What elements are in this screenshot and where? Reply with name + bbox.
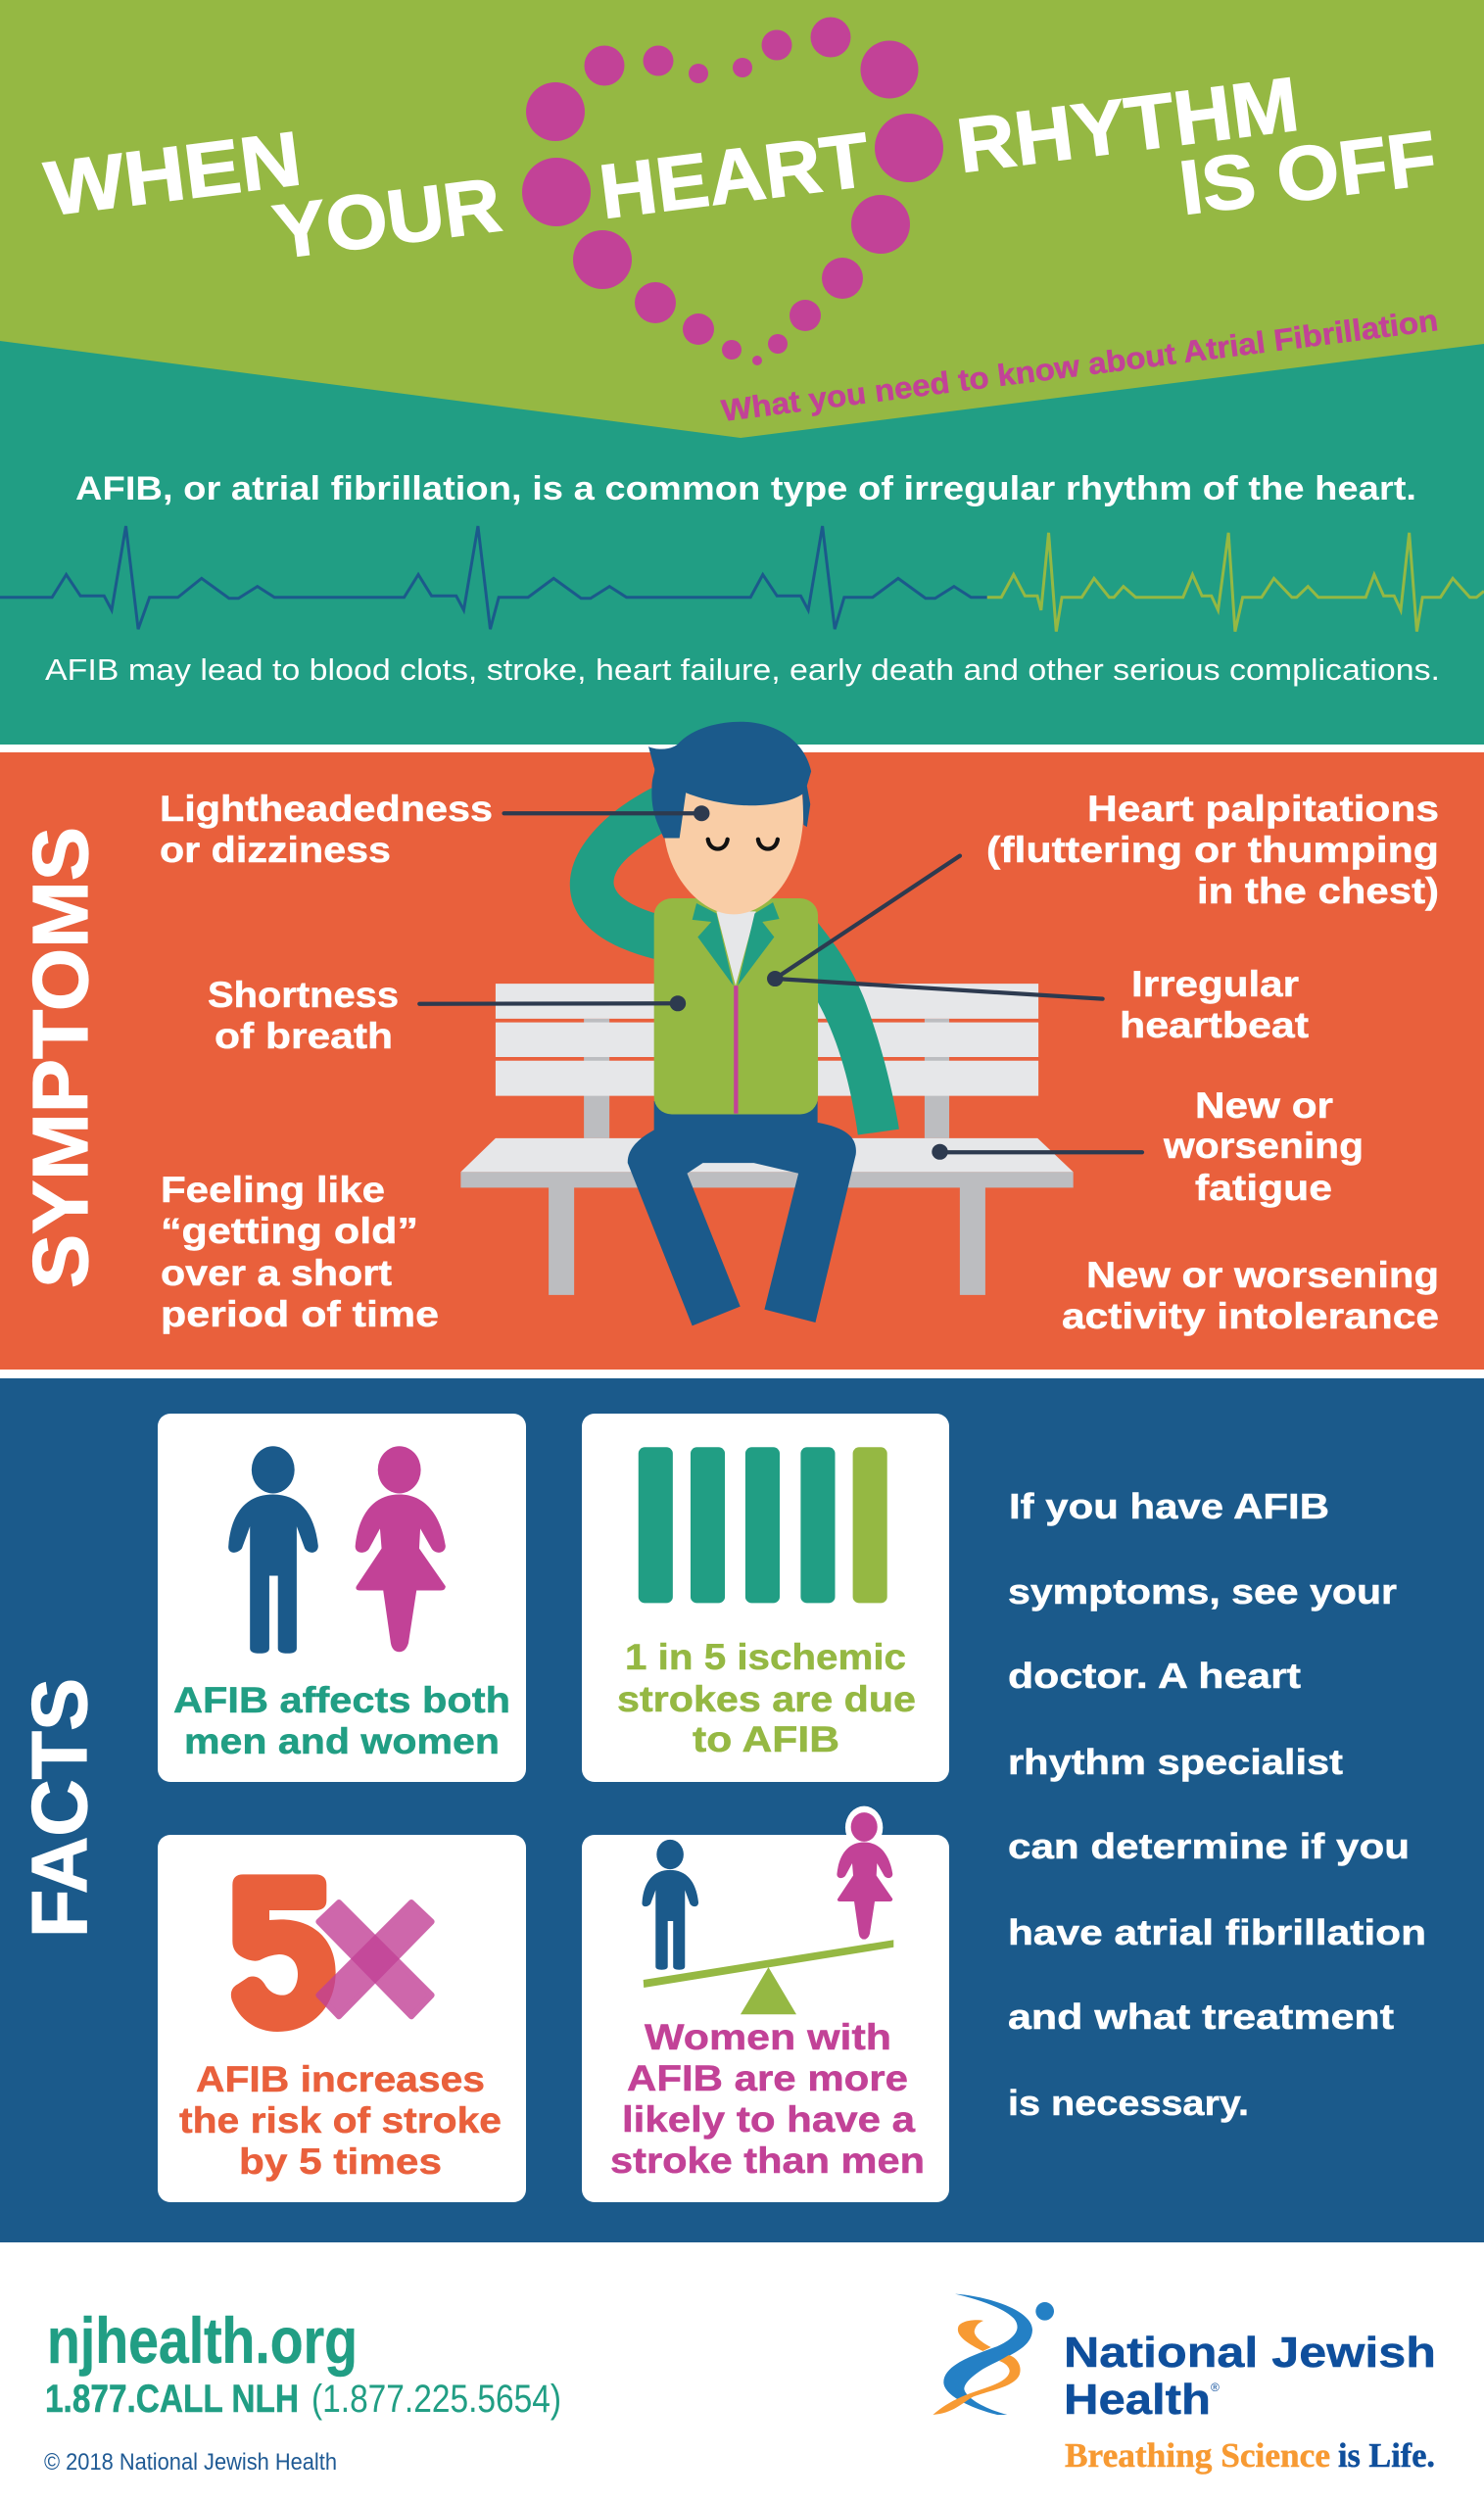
panel: footer [44,2294,1436,2476]
symptom: irregular heartbeat: heartbeat [1120,1005,1309,1045]
phone number [45,2378,561,2421]
advice text: is necessary. [1008,2083,1249,2123]
panel: facts [0,1378,1484,2242]
icon: man and woman [228,1446,446,1654]
symptom: activity intolerance: New or worsening [1086,1255,1439,1295]
callout lines [419,805,1142,1160]
advice text: doctor. A heart [1008,1656,1301,1696]
icon: 5x [231,1874,432,2032]
advice text: rhythm specialist [1008,1742,1343,1782]
definition complications text: AFIB may lead to blood clots, stroke, heart failure, early death and other serious complications. [45,652,1440,687]
icon: logo mark [933,2294,1054,2415]
symptom: palpitations [986,789,1439,911]
symptom: feeling old: “getting old” [161,1211,418,1251]
card text: likely to have a [622,2099,915,2140]
panel: header [0,0,1484,438]
symptom: shortness of breath: of breath [215,1016,393,1056]
card text: men and women [184,1721,500,1761]
symptom: feeling old: Feeling like [161,1170,385,1210]
symptom: palpitations: in the chest) [1197,871,1439,911]
symptom: lightheadedness: or dizziness [160,830,391,870]
card: 1 in 5 strokes [582,1414,949,1782]
panel: definition [0,333,1484,745]
card text: AFIB affects both [173,1680,510,1720]
card text: the risk of stroke [179,2100,502,2140]
card: five times risk [158,1835,526,2202]
title: IS OFF: IS OFF [1174,114,1441,231]
facts section label: FACTS [16,1678,103,1938]
card text [179,2059,502,2182]
tagline: Breathing Science [1065,2436,1330,2475]
icon: five bars [639,1447,887,1603]
card text [617,1637,916,1759]
heart of dots [522,18,943,365]
symptom: activity intolerance [1062,1255,1439,1336]
ECG line: irregular rhythm [987,533,1484,632]
logo wordmark: ® [1211,2381,1220,2394]
symptom: shortness of breath [208,975,399,1056]
symptom: fatigue: fatigue [1195,1168,1332,1208]
card text: 1 in 5 ischemic [625,1637,906,1677]
card text [173,1680,510,1761]
ECG line: normal rhythm [0,526,987,629]
advice text: If you have AFIB [1009,1486,1329,1526]
bench [460,984,1074,1295]
advice text: have atrial fibrillation [1008,1912,1426,1952]
copyright: © 2018 National Jewish Health [44,2449,337,2476]
logo wordmark: National Jewish [1064,2329,1436,2377]
symptom: lightheadedness [160,789,493,870]
website: njhealth.org [47,2304,358,2377]
symptom: irregular heartbeat: Irregular [1131,964,1299,1004]
card text: stroke than men [610,2140,925,2181]
symptom: shortness of breath: Shortness [208,975,399,1015]
card: women at higher risk [582,1806,949,2202]
logo wordmark [1064,2329,1436,2424]
title: HEART: HEART [595,116,874,235]
title: WHEN: WHEN [40,115,306,232]
symptom: palpitations: (fluttering or thumping [986,830,1439,870]
card text [610,2017,925,2181]
card text: Women with [645,2017,891,2057]
logo wordmark: Health [1064,2376,1211,2424]
advice text: symptoms, see your [1008,1571,1397,1611]
advice text [1008,1486,1426,2123]
subtitle: What you need to know about Atrial Fibrillation [719,303,1440,428]
symptom: lightheadedness: Lightheadedness [160,789,493,829]
symptom: fatigue: New or [1195,1085,1333,1126]
icon: balance scale [642,1806,893,2014]
symptom: irregular heartbeat [1120,964,1309,1045]
symptom: feeling old [161,1170,439,1334]
title: RHYTHM: RHYTHM [952,61,1303,189]
card text: AFIB increases [196,2059,485,2099]
panel: symptoms [0,722,1484,1370]
card text: by 5 times [239,2141,442,2182]
card text: strokes are due [617,1679,916,1719]
tagline: is Life. [1338,2436,1435,2475]
advice text: and what treatment [1008,1996,1394,2037]
phone number: 1.877.CALL NLH [45,2378,299,2421]
card: men and women [158,1414,526,1782]
symptom: fatigue: worsening [1163,1126,1364,1166]
card text: to AFIB [693,1719,839,1759]
advice text: can determine if you [1008,1826,1410,1866]
symptom: feeling old: over a short [161,1253,392,1293]
figure on bench with callout lines [419,722,1142,1325]
symptom: fatigue [1163,1085,1364,1208]
symptom: feeling old: period of time [161,1294,439,1334]
card text: AFIB are more [627,2058,908,2098]
symptom: activity intolerance: activity intolerance [1062,1296,1439,1336]
phone number: (1.877.225.5654) [311,2378,561,2421]
symptom: palpitations: Heart palpitations [1087,789,1439,829]
person [570,722,899,1325]
symptoms section label: SYMPTOMS [17,827,104,1288]
definition headline: AFIB, or atrial fibrillation, is a common type of irregular rhythm of the heart. [75,470,1416,507]
title: YOUR: YOUR [268,161,505,275]
